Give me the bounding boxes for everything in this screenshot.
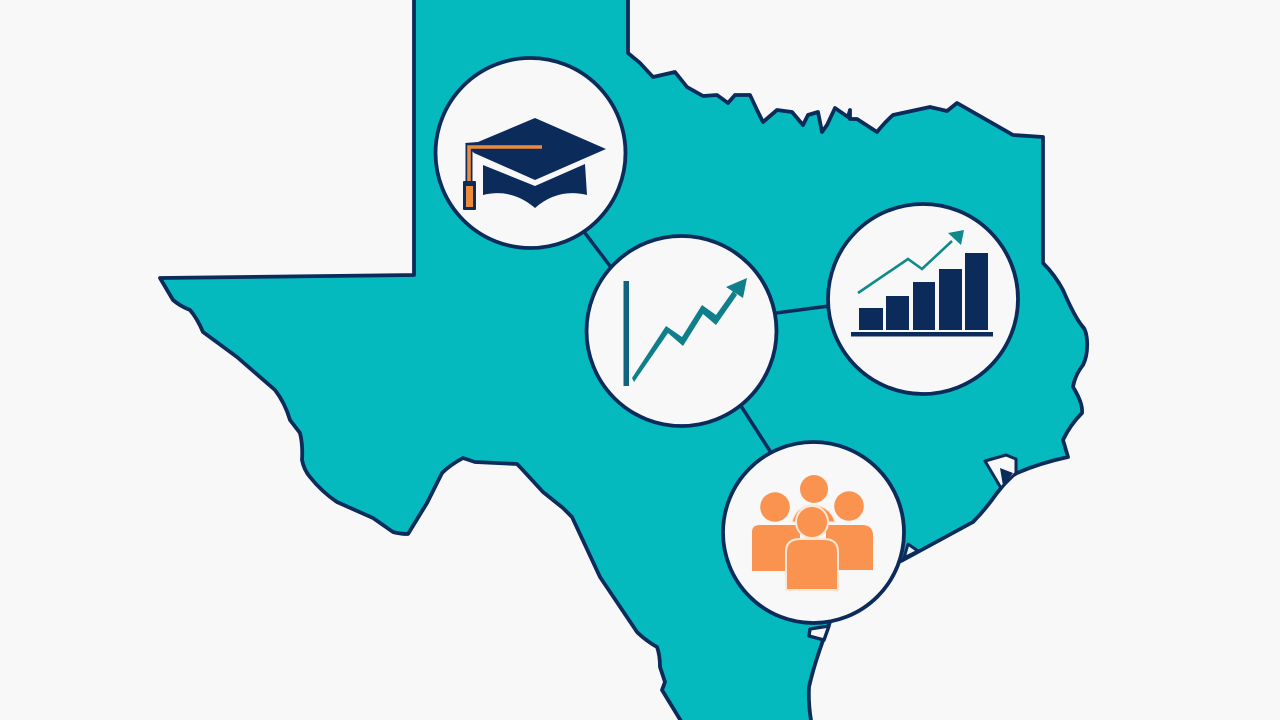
icon: rising trend line	[586, 236, 776, 426]
map: Texas state shape	[160, 0, 1087, 720]
state outline and fill	[160, 0, 1087, 720]
icon: graduation cap	[436, 58, 626, 248]
icon: bar chart with arrow	[828, 204, 1018, 394]
icon: group of people	[723, 442, 904, 623]
bay: Matagorda inlet	[904, 544, 918, 558]
bay: Galveston inlet	[985, 455, 1016, 488]
connector: trend to bar chart	[776, 306, 829, 313]
connector: trend to people	[741, 406, 770, 451]
connector: cap to trend	[585, 233, 610, 266]
bay: Corpus Christi inlet	[809, 626, 829, 640]
